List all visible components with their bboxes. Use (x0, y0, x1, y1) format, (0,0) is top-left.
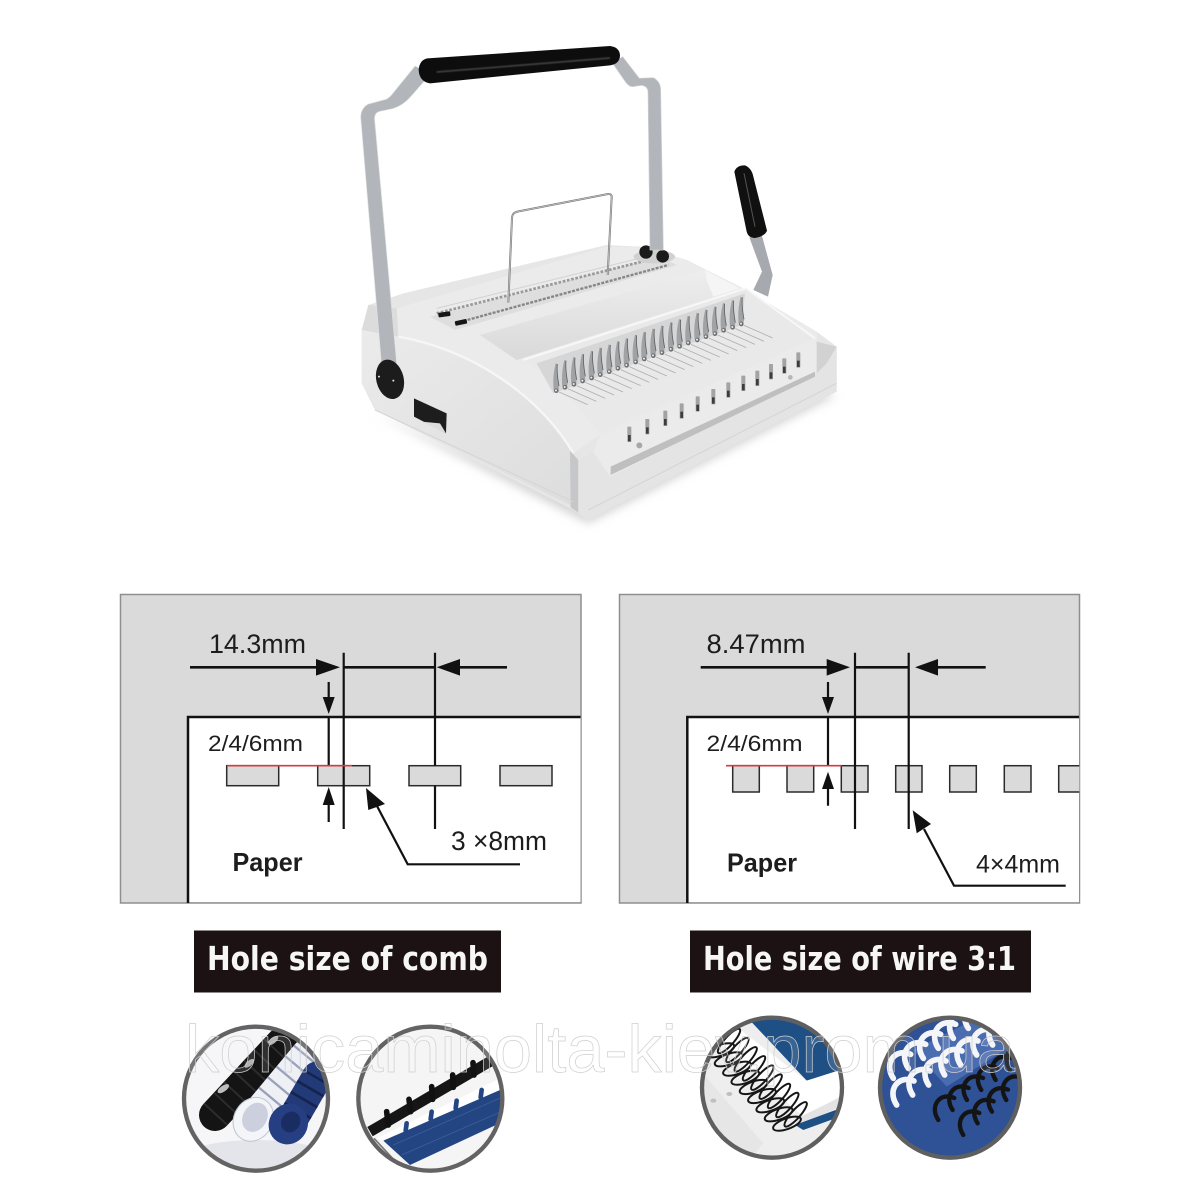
comb margin red line (227, 765, 352, 767)
comb paper edge (188, 717, 580, 903)
adjustment knobs (634, 245, 675, 263)
label: hole size of wire: Hole size of wire 3:1 (703, 939, 1016, 978)
wire holes (733, 766, 1079, 792)
text: 3×8mm: 3 ×8mm (451, 826, 547, 856)
front slots (627, 352, 800, 448)
text: 2/4/6mm: 2/4/6mm (208, 731, 303, 756)
machine shadow (373, 390, 837, 523)
panel: comb hole diagram (120, 594, 581, 903)
label: hole size of comb: Hole size of comb (207, 939, 488, 978)
wire paper sheet (687, 717, 1079, 902)
icon: plastic combs (183, 1025, 329, 1173)
base step line (375, 383, 837, 510)
wire margin red line (726, 765, 842, 767)
wire pitch dimension (701, 653, 986, 829)
text: Paper: Paper (232, 847, 302, 877)
comb holes (227, 766, 552, 786)
side lever grip (734, 165, 767, 238)
punching fingers (553, 297, 773, 405)
text: 4×4mm: 4×4mm (976, 850, 1060, 878)
icon: comb bound document (357, 1025, 507, 1172)
label: hole size of comb (194, 930, 501, 992)
comb panel background (120, 594, 581, 903)
front lower face (578, 347, 837, 520)
front control panel (593, 342, 817, 477)
label: hole size of wire (690, 930, 1031, 992)
wire margin dimension (822, 682, 834, 806)
paper guide wire (508, 194, 612, 303)
machine body (362, 245, 837, 520)
side seam strip (570, 451, 578, 513)
wire hole leader arrow (913, 810, 1066, 886)
comb hole leader arrow (366, 788, 520, 864)
power switch (414, 398, 447, 433)
wire paper edge (687, 717, 1079, 903)
comb margin dimension (323, 682, 335, 822)
icon: wire bound notebook (700, 1013, 847, 1163)
comb tray (523, 288, 815, 434)
guide rails (437, 254, 668, 326)
side lever arm (749, 236, 773, 297)
panel: wire hole diagram (620, 594, 1080, 903)
product photo: comb and wire binding machine (361, 46, 837, 523)
left side face (362, 330, 573, 507)
pivot disc (372, 357, 408, 402)
main handle black grip (419, 46, 620, 83)
wire panel background (620, 594, 1080, 903)
watermark: konicaminolta-kiev.prom.ua (185, 1012, 1016, 1087)
wire storage trough (480, 270, 740, 360)
comb pitch dimension (190, 653, 507, 829)
left curved lip (398, 337, 573, 453)
top surface (397, 247, 817, 453)
left rear foot (362, 305, 398, 337)
right corner bevel (817, 342, 837, 373)
comb paper sheet (188, 717, 580, 903)
rail plate (430, 257, 677, 330)
front recess strip (611, 372, 815, 475)
text: 8.47mm: 8.47mm (706, 629, 806, 659)
trough end highlight (705, 270, 740, 297)
text: Paper: Paper (727, 848, 797, 878)
text: 14.3mm: 14.3mm (209, 629, 306, 659)
tray rim (523, 288, 815, 360)
tray back wall (537, 293, 745, 393)
icon: double loop wires (879, 1003, 1026, 1159)
main handle left arm (361, 66, 431, 367)
text: 2/4/6mm: 2/4/6mm (706, 731, 802, 756)
main handle right arm (613, 57, 663, 250)
